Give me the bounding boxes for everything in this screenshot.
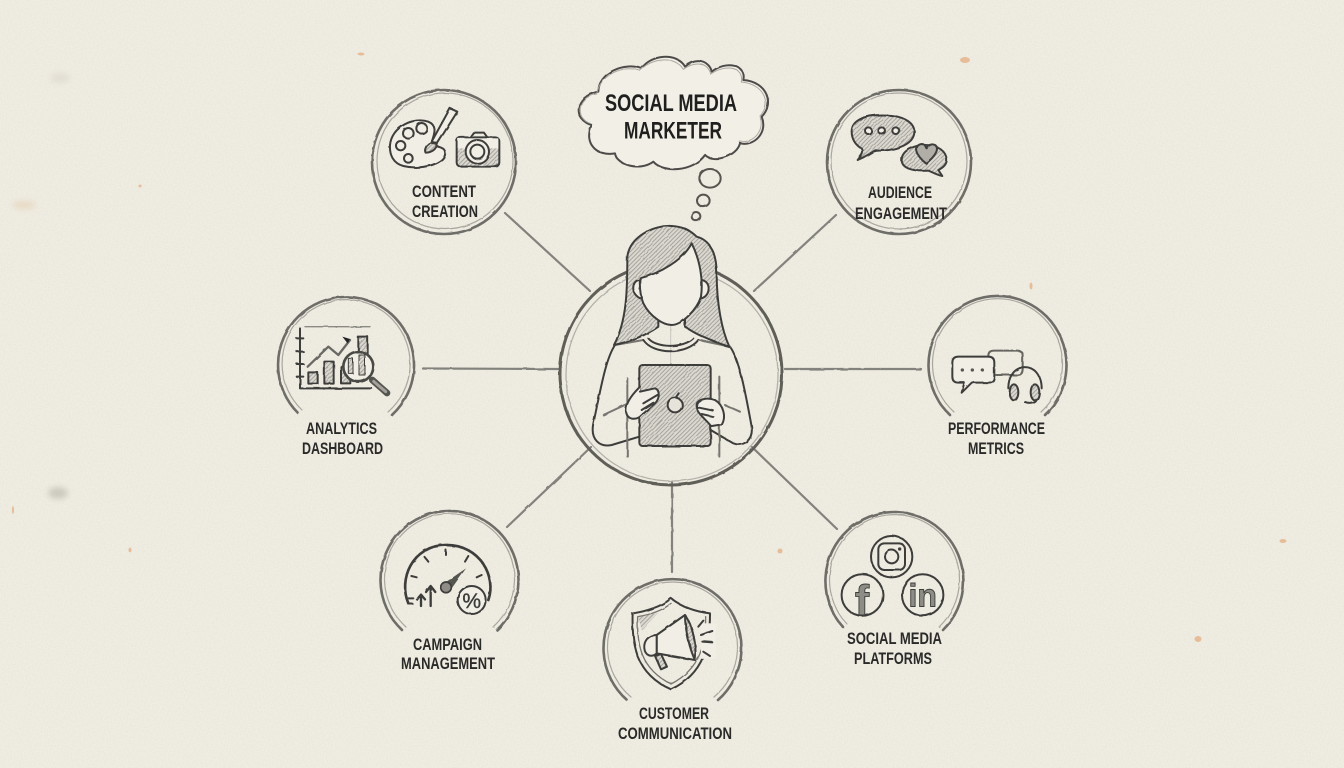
title line two: MARKETER xyxy=(624,118,722,144)
central circle xyxy=(560,263,782,485)
label: MANAGEMENT xyxy=(401,655,495,673)
panel: content creation xyxy=(372,90,516,234)
collar xyxy=(643,338,698,351)
label: COMMUNICATION xyxy=(618,725,732,743)
icon: chat bubbles with headset xyxy=(952,351,1042,403)
label: CAMPAIGN xyxy=(413,636,482,654)
label: SOCIAL MEDIA xyxy=(847,630,942,648)
label: ANALYTICS xyxy=(306,420,377,438)
icon: instagram xyxy=(871,536,912,577)
icon: chat and heart bubbles xyxy=(852,115,947,176)
right hand xyxy=(696,399,724,427)
node ring xyxy=(380,511,518,630)
hair xyxy=(614,226,729,347)
node ring xyxy=(928,296,1066,415)
icon: facebook: f xyxy=(855,577,870,625)
node ring xyxy=(372,90,516,234)
panel: customer communication xyxy=(604,579,742,743)
label: CREATION xyxy=(412,203,478,221)
face xyxy=(640,243,702,325)
label: METRICS xyxy=(968,440,1024,458)
panel: audience engagement xyxy=(827,90,971,234)
node ring xyxy=(827,90,971,234)
thought bubbles xyxy=(692,169,721,221)
icon: linkedin: in xyxy=(908,578,937,614)
ears xyxy=(633,280,709,298)
panel: analytics dashboard xyxy=(278,297,414,458)
tablet logo xyxy=(668,398,682,412)
label: DASHBOARD xyxy=(302,440,383,458)
icon: gauge with percent xyxy=(405,545,490,614)
panel: performance metrics xyxy=(928,296,1066,458)
icon: palette and camera xyxy=(390,108,499,167)
icon: facebook xyxy=(842,574,883,625)
left hand xyxy=(626,387,659,419)
icon: percent sign: % xyxy=(462,590,481,613)
panel: campaign management xyxy=(380,511,518,673)
torso xyxy=(593,345,752,445)
thought cloud with title xyxy=(579,57,768,221)
panel: social media platforms xyxy=(825,512,963,668)
tablet xyxy=(639,365,711,446)
title line one: SOCIAL MEDIA xyxy=(605,90,737,117)
cloud outline xyxy=(579,57,768,169)
label: CONTENT xyxy=(412,183,476,201)
node ring xyxy=(604,579,742,700)
icon: linkedin xyxy=(902,574,943,616)
icon: shield with megaphone xyxy=(633,598,716,689)
label: AUDIENCE xyxy=(868,184,932,202)
label: ENGAGEMENT xyxy=(855,205,947,223)
label: PLATFORMS xyxy=(854,650,932,668)
label: PERFORMANCE xyxy=(948,420,1045,438)
icon: bar chart with magnifier xyxy=(297,327,387,393)
label: CUSTOMER xyxy=(639,705,709,723)
node ring xyxy=(825,512,963,630)
node ring xyxy=(278,297,414,415)
central figure: marketer with tablet xyxy=(593,226,752,457)
connector lines xyxy=(423,213,921,572)
